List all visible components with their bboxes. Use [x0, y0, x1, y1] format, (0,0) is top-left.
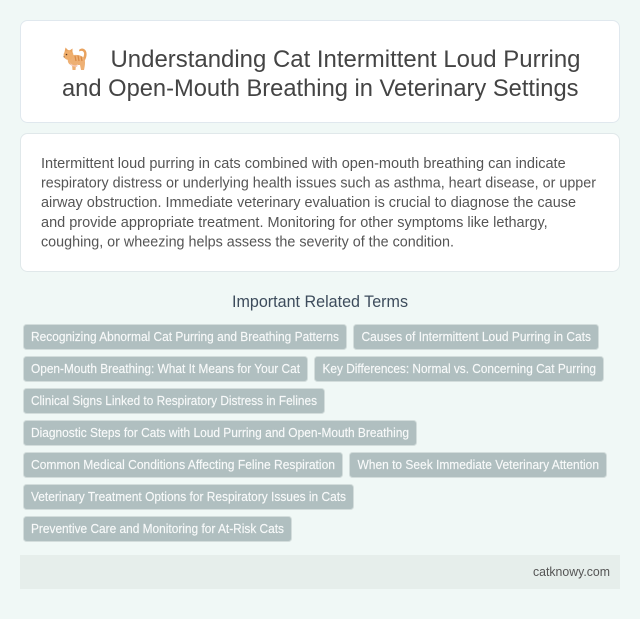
- tag: treatment options: [24, 484, 354, 510]
- tag: when to seek attention: When to Seek Immediate Veterinary Attention: [358, 458, 599, 472]
- tag: open-mouth breathing: [24, 356, 308, 382]
- tag: recognizing abnormal purring: [24, 324, 346, 350]
- text block: description: and provide appropriate treatment. Monitoring for other symptoms like lethargy,: [41, 215, 548, 231]
- icon: orange cat: [63, 48, 87, 70]
- tag: clinical signs: Clinical Signs Linked to Respiratory Distress in Felines: [31, 394, 317, 408]
- title: Understanding Cat Intermittent Loud Purring: [110, 46, 580, 73]
- tag: causes of loud purring: [354, 324, 598, 350]
- tag: preventive care: [24, 516, 292, 542]
- text block: description: [41, 156, 596, 250]
- tag: preventive care: Preventive Care and Monitoring for At-Risk Cats: [31, 522, 284, 536]
- panel: title card: [20, 20, 620, 122]
- text block: description: respiratory distress or underlying health issues such as asthma, heart disease, or upper: [41, 176, 596, 192]
- tag: clinical signs: [24, 388, 324, 414]
- tag: recognizing abnormal purring: Recognizing Abnormal Cat Purring and Breathing Patterns: [31, 330, 339, 344]
- tag list: related terms: [24, 324, 606, 542]
- tag: key differences: Key Differences: Normal vs. Concerning Cat Purring: [322, 362, 596, 376]
- tag: key differences: [314, 356, 604, 382]
- tag: treatment options: Veterinary Treatment Options for Respiratory Issues in Cats: [31, 490, 346, 504]
- tag: open-mouth breathing: Open-Mouth Breathing: What It Means for Your Cat: [31, 362, 300, 376]
- tag: causes of loud purring: Causes of Intermittent Loud Purring in Cats: [362, 330, 591, 344]
- footer bar: [20, 555, 620, 589]
- text block: description: airway obstruction. Immediate veterinary evaluation is crucial to diagnose the cause: [41, 195, 576, 211]
- tag: diagnostic steps: Diagnostic Steps for Cats with Loud Purring and Open-Mouth Breathing: [31, 426, 409, 440]
- tag: common medical conditions: [24, 452, 342, 478]
- text block: description: coughing, or wheezing helps assess the severity of the condition.: [41, 234, 454, 250]
- text block: description: Intermittent loud purring in cats combined with open-mouth breathing can indicate: [41, 156, 566, 172]
- panel: description card: [20, 134, 620, 272]
- tag: common medical conditions: Common Medical Conditions Affecting Feline Respiration: [31, 458, 335, 472]
- tag: diagnostic steps: [24, 420, 416, 446]
- tag: when to seek attention: [350, 452, 606, 478]
- footer: site name: catknowy.com: [533, 565, 610, 579]
- heading: important related terms: Important Related Terms: [232, 293, 408, 311]
- title: [62, 46, 580, 102]
- title: and Open-Mouth Breathing in Veterinary Settings: [62, 75, 578, 102]
